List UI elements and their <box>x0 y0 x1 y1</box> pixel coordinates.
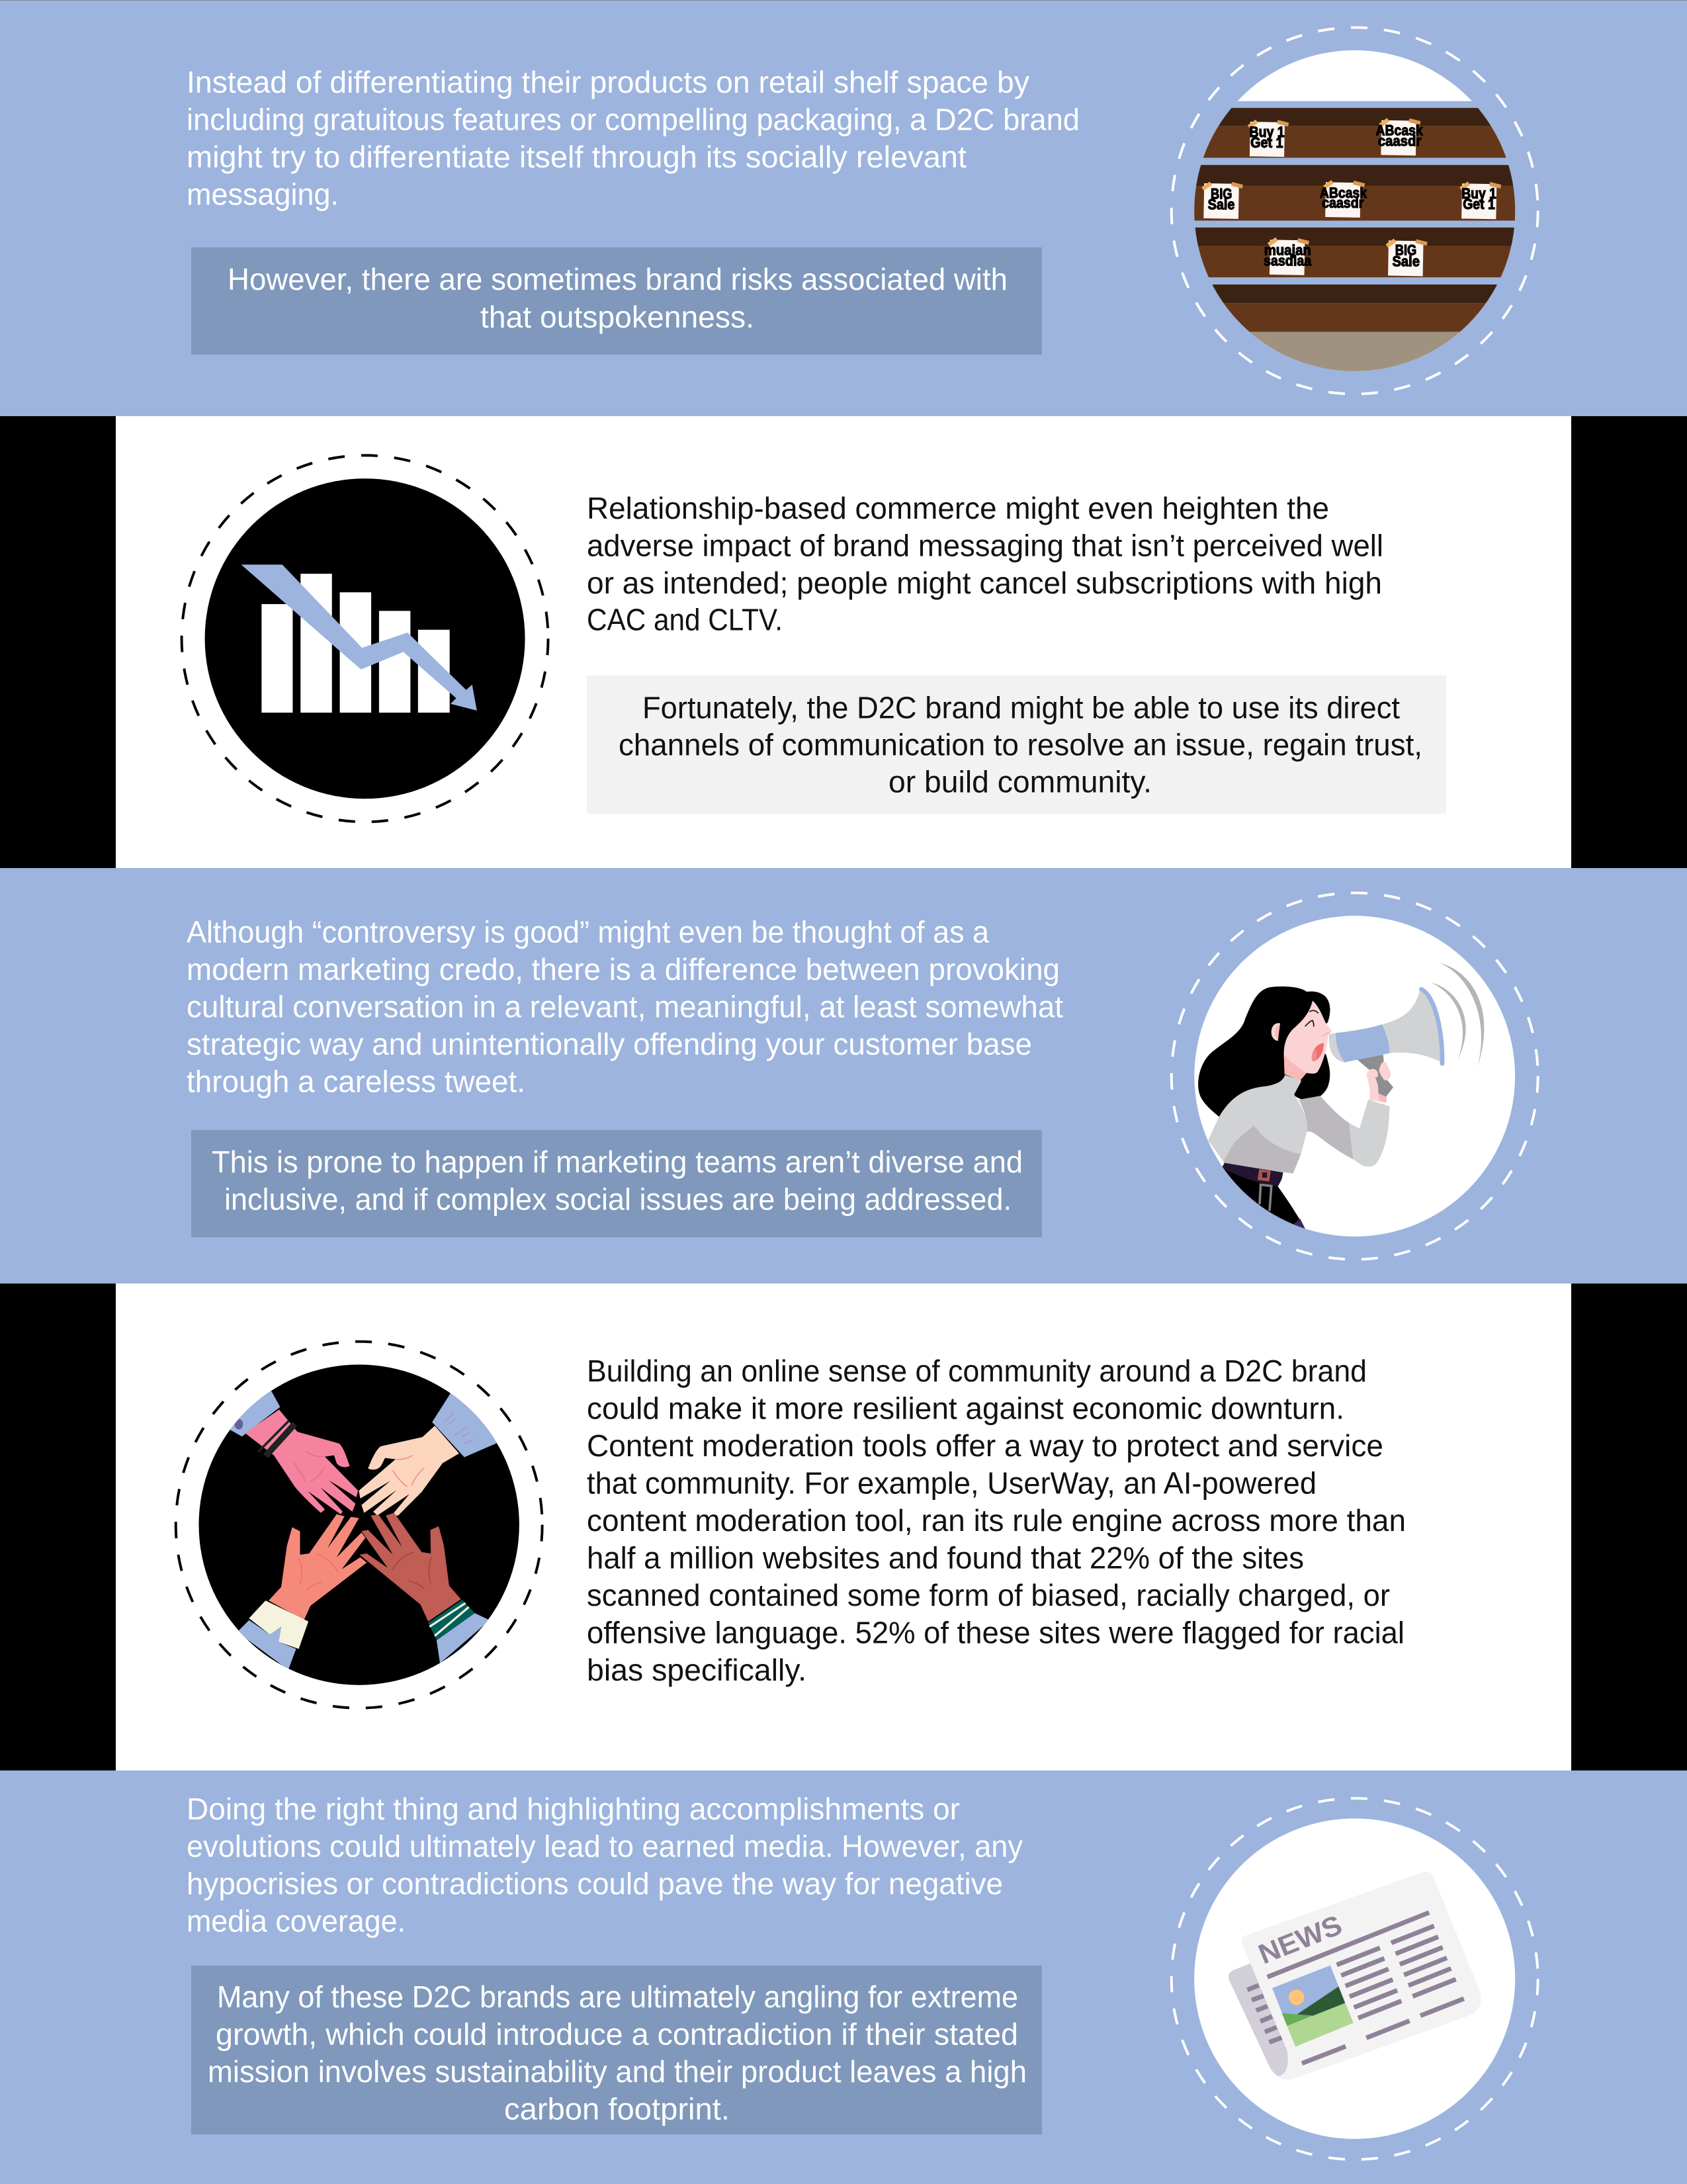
text block: relationship commerce paragraph: CAC and CLTV. <box>587 602 783 636</box>
callout: extreme growth contradiction <box>191 1966 1042 2134</box>
text block: relationship commerce paragraph: adverse impact of brand messaging that isn’t perceived well <box>587 528 1383 562</box>
callout: diverse teams <box>191 1130 1042 1237</box>
sign: muajan sasdlaa: sasdlaa <box>1264 253 1312 269</box>
text block: community paragraph <box>587 1354 1406 1687</box>
callout: diverse teams: inclusive, and if complex social issues are being addressed. <box>224 1182 1012 1216</box>
text block: controversy paragraph: strategic way and unintentionally offending your customer base <box>187 1027 1032 1061</box>
icon: declining bar chart <box>182 455 548 822</box>
sign: BIG Sale: BIG <box>1211 186 1232 202</box>
callout: extreme growth contradiction: carbon footprint. <box>504 2092 730 2126</box>
sign: BIG Sale: Sale <box>1208 197 1234 213</box>
text block: community paragraph: scanned contained some form of biased, racially charged, or <box>587 1578 1390 1612</box>
sign: ABcask caasdr: ABcask <box>1376 122 1423 138</box>
text block: differentiation paragraph: messaging. <box>187 177 339 212</box>
sign: ABcask caasdr <box>1376 118 1423 155</box>
text block: relationship commerce paragraph: Relationship-based commerce might even heighten the <box>587 491 1329 525</box>
callout: brand risks <box>191 247 1042 355</box>
icon: newspaper: NEWS <box>1254 1909 1346 1970</box>
sign: Buy 1 Get 1 right <box>1459 181 1501 219</box>
sign: Buy 1 Get 1 right: Get 1 <box>1463 196 1495 212</box>
text block: differentiation paragraph: including gratuitous features or compelling packaging, a D2C brand <box>187 102 1080 136</box>
text block: relationship commerce paragraph <box>587 491 1383 636</box>
text block: community paragraph: half a million websites and found that 22% of the sites <box>587 1540 1304 1575</box>
sign: Buy 1 Get 1: Get 1 <box>1250 134 1283 151</box>
panel: controversy <box>0 868 1687 1284</box>
sign: muajan sasdlaa <box>1264 238 1312 275</box>
sign: Buy 1 Get 1 <box>1248 120 1289 157</box>
panel: earned media <box>0 1770 1687 2184</box>
sign: BIG Sale <box>1201 181 1243 219</box>
text block: earned media paragraph: hypocrisies or contradictions could pave the way for negative <box>187 1866 1003 1901</box>
sign: ABcask caasdr center <box>1320 180 1367 218</box>
callout: brand risks: However, there are sometimes brand risks associated with <box>228 262 1008 296</box>
sign: Buy 1 Get 1: Buy 1 <box>1250 124 1285 140</box>
sign: BIG Sale lower: Sale <box>1392 253 1420 269</box>
callout: extreme growth contradiction: Many of these D2C brands are ultimately angling for extreme <box>217 1980 1018 2014</box>
text block: community paragraph: Content moderation tools offer a way to protect and service <box>587 1428 1383 1463</box>
sign: BIG Sale lower <box>1385 239 1428 276</box>
callout: direct channels <box>587 676 1446 814</box>
text block: earned media paragraph: Doing the right thing and highlighting accomplishments or <box>187 1792 960 1826</box>
text block: community paragraph: could make it more resilient against economic downturn. <box>587 1391 1344 1425</box>
callout: direct channels: channels of communication to resolve an issue, regain trust, <box>619 728 1422 762</box>
icon: four joined hands <box>176 1342 542 1708</box>
text block: controversy paragraph: cultural conversation in a relevant, meaningful, at least somewhat <box>187 990 1063 1024</box>
callout: direct channels: or build community. <box>888 765 1152 799</box>
icon: retail shelves <box>1172 28 1538 394</box>
sign: Buy 1 Get 1 right: Buy 1 <box>1461 185 1496 202</box>
sign: ABcask caasdr center: ABcask <box>1320 185 1367 201</box>
sign: ABcask caasdr: caasdr <box>1378 132 1422 149</box>
text block: differentiation paragraph <box>187 65 1080 212</box>
text block: controversy paragraph: Although “controversy is good” might even be thought of as a <box>187 914 989 949</box>
text block: relationship commerce paragraph: or as intended; people might cancel subscriptions with high <box>587 566 1382 600</box>
callout: extreme growth contradiction: mission involves sustainability and their product leaves a high <box>208 2054 1027 2089</box>
callout: brand risks: that outspokenness. <box>480 300 754 334</box>
text block: earned media paragraph: evolutions could ultimately lead to earned media. However, any <box>187 1829 1023 1863</box>
panel: online community <box>0 1284 1687 1770</box>
sign: BIG Sale lower: BIG <box>1395 242 1416 259</box>
callout: extreme growth contradiction: growth, which could introduce a contradiction if their stated <box>216 2017 1018 2051</box>
text block: earned media paragraph <box>187 1792 1023 1939</box>
text block: community paragraph: offensive language. 52% of these sites were flagged for racial <box>587 1616 1405 1650</box>
icon: woman with megaphone <box>1172 893 1538 1260</box>
icon: newspaper <box>1172 1798 1538 2160</box>
text block: community paragraph: Building an online sense of community around a D2C brand <box>587 1354 1367 1388</box>
callout: diverse teams: This is prone to happen if marketing teams aren’t diverse and <box>212 1145 1023 1179</box>
text block: earned media paragraph: media coverage. <box>187 1904 406 1939</box>
text block: community paragraph: bias specifically. <box>587 1653 806 1687</box>
sign: muajan sasdlaa: muajan <box>1264 242 1311 259</box>
text block: controversy paragraph <box>187 914 1063 1098</box>
text block: differentiation paragraph: might try to differentiate itself through its socially relevant <box>187 140 967 174</box>
text block: controversy paragraph: modern marketing credo, there is a difference between provoking <box>187 952 1060 986</box>
panel: shelf differentiation <box>0 0 1687 416</box>
text block: community paragraph: content moderation tool, ran its rule engine across more than <box>587 1503 1406 1538</box>
text block: differentiation paragraph: Instead of differentiating their products on retail shelf space by <box>187 65 1029 99</box>
callout: direct channels: Fortunately, the D2C brand might be able to use its direct <box>642 691 1400 725</box>
sign: ABcask caasdr center: caasdr <box>1322 195 1364 211</box>
text block: community paragraph: that community. For example, UserWay, an AI-powered <box>587 1466 1317 1501</box>
text block: controversy paragraph: through a careless tweet. <box>187 1064 525 1098</box>
panel: relationship commerce <box>0 416 1687 868</box>
